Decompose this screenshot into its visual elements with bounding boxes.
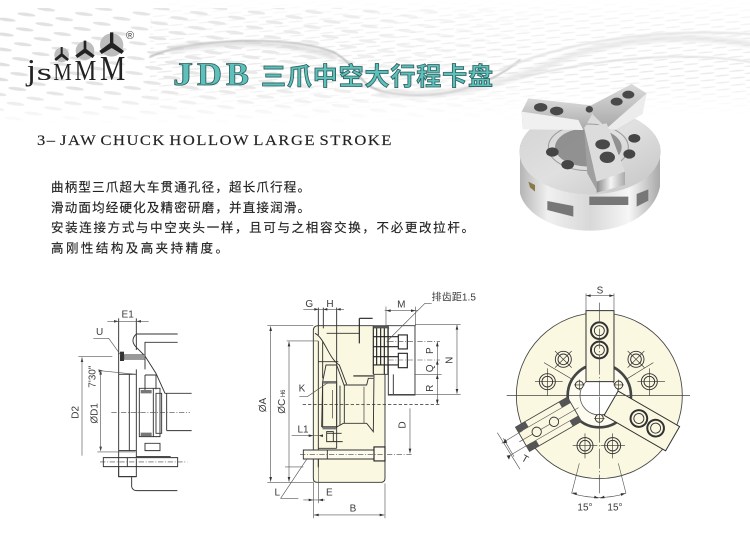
feature text block: 安装连接方式与中空夹头一样，且可与之相容交换，不必更改拉杆。 (51, 220, 474, 235)
label: N: N (445, 357, 456, 364)
jaw bolt holes (534, 91, 634, 163)
label: L: L (275, 488, 281, 499)
dimension lines (267, 303, 461, 518)
label: R: R (425, 385, 436, 392)
background wave pattern (0, 8, 750, 114)
icon: large chuck (99, 32, 124, 57)
title: JDB: B (226, 57, 249, 93)
label: Q: Q (425, 364, 436, 372)
jaw: front (584, 123, 625, 182)
feature text block: 曲柄型三爪超大车贯通孔径，超长爪行程。 (51, 180, 310, 194)
product photo: 3-jaw chuck (519, 84, 661, 231)
drawing: main cross section (258, 290, 476, 518)
icon: medium chuck (75, 41, 95, 60)
label: ØC H6: ØC H6 (277, 389, 288, 414)
mounting holes (535, 351, 665, 458)
drawing: front view (497, 285, 690, 514)
label: D2: D2 (71, 405, 82, 419)
label: B: B (350, 504, 357, 515)
title: JDB (173, 57, 249, 93)
logo wordmark (26, 50, 125, 88)
jaw: back right (590, 84, 647, 128)
feature text block: 滑动面均经硬化及精密研磨，并直接润滑。 (51, 200, 310, 215)
logo wordmark: M (53, 59, 72, 86)
label: H: H (326, 299, 334, 310)
title: Chinese: 三爪中空大行程卡盘 (261, 63, 493, 91)
rear bolt (300, 447, 413, 468)
title: JDB: D (197, 57, 222, 93)
chuck body (520, 145, 660, 231)
subtitle: 3– JAW CHUCK HOLLOW LARGE STROKE (37, 133, 393, 149)
jaw: lower right (604, 391, 680, 451)
label: pitch: 排齿距1.5 (432, 290, 476, 303)
logo wordmark: M (75, 56, 96, 87)
feature text block (51, 180, 474, 256)
title: JDB: J (173, 57, 193, 93)
drawing: rear mounting section (71, 310, 192, 491)
label: U: U (96, 327, 103, 338)
icon: small chuck (54, 47, 69, 62)
label: ØD1: ØD1 (90, 403, 101, 424)
face bolt holes (546, 134, 640, 169)
jaw: top (586, 311, 614, 382)
section outline (100, 318, 192, 491)
registered mark: ® (126, 30, 134, 42)
side slots (528, 182, 648, 217)
logo wordmark: s (37, 60, 52, 86)
feature text block: 高刚性结构及高夹持精度。 (51, 240, 228, 256)
jaw teeth and bolts (373, 326, 440, 395)
label: 15 degrees right: 15° (607, 503, 623, 514)
label: T: T (519, 453, 530, 466)
chuck body (313, 326, 385, 482)
section outline (313, 308, 388, 482)
jaw: lower left serrated (512, 395, 585, 453)
label: E: E (326, 488, 333, 499)
label: P: P (425, 347, 436, 354)
central bore (568, 364, 631, 427)
centre line (303, 403, 440, 405)
label: L1: L1 (297, 424, 309, 435)
logo: JSMMM (26, 30, 134, 88)
label: G: G (305, 299, 313, 310)
logo wordmark: j (26, 53, 36, 87)
label: E1: E1 (122, 310, 134, 321)
label: K: K (299, 384, 306, 395)
dimension lines (78, 320, 149, 456)
label: M: M (397, 300, 405, 311)
label: S: S (597, 285, 604, 296)
logo wordmark: M (100, 50, 125, 88)
label: 7'30": 7'30" (88, 365, 99, 388)
chuck face (516, 313, 682, 479)
label: 15 degrees left: 15° (577, 503, 593, 514)
label: D: D (398, 421, 409, 429)
jaw: back left (522, 98, 597, 130)
label: ØA: ØA (258, 397, 269, 412)
dimension lines (497, 293, 626, 498)
centre lines (507, 303, 690, 493)
